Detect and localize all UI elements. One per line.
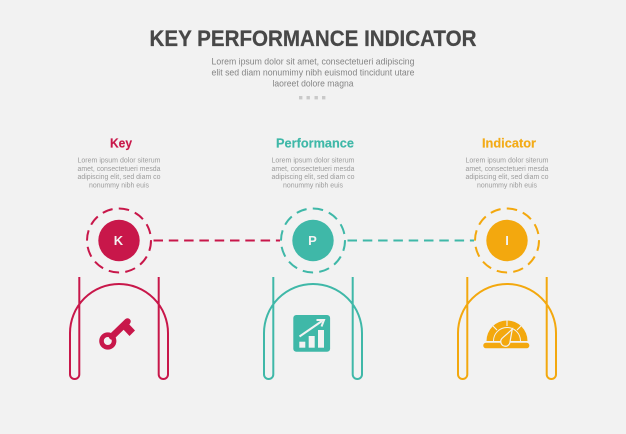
connector: key to performance (154, 240, 280, 242)
badge: I (475, 208, 539, 272)
description text: Lorem ipsum dolor sit amet, consectetueri adipiscing (212, 56, 415, 66)
text block: performance: amet, consectetueri mesda (272, 164, 355, 173)
text block: indicator: nonummy nibh euis (477, 180, 537, 190)
heading: performance: Performance (276, 136, 354, 150)
arch outline: performance (264, 277, 362, 379)
description text: elit sed diam nonumimy nibh euismod tincidunt utare (212, 68, 415, 78)
text block: indicator: amet, consectetueri mesda (466, 164, 549, 173)
title: KEY PERFORMANCE INDICATOR (150, 26, 476, 51)
badge: P (281, 208, 345, 272)
text block: key (78, 156, 161, 190)
badge: K (87, 208, 151, 272)
text block: indicator: adipiscing elit, sed diam co (466, 172, 548, 181)
connector: performance to indicator (348, 240, 474, 242)
text block: performance (272, 156, 355, 190)
pagination dots (299, 96, 325, 99)
panel: performance (264, 136, 362, 379)
text block: key: Lorem ipsum dolor siterum (78, 156, 160, 164)
text block: key: nonummy nibh euis (89, 180, 149, 190)
arch outline: key (70, 277, 168, 379)
heading: indicator: Indicator (482, 136, 536, 150)
icon: growth chart (293, 315, 330, 352)
text block: key: adipiscing elit, sed diam co (78, 172, 160, 181)
arch outline: indicator (458, 277, 556, 379)
text block: key: amet, consectetueri mesda (78, 164, 161, 173)
badge: I: I (505, 233, 509, 248)
text block: performance: Lorem ipsum dolor siterum (272, 156, 354, 164)
panel: key (70, 136, 168, 379)
text block: indicator: Lorem ipsum dolor siterum (466, 156, 548, 164)
panel: indicator (458, 136, 556, 379)
text block: performance: nonummy nibh euis (283, 180, 343, 190)
icon: key (102, 322, 135, 347)
icon: gauge (483, 320, 529, 348)
text block: indicator (466, 156, 549, 190)
badge: K: K (114, 233, 124, 248)
text block: performance: adipiscing elit, sed diam co (272, 172, 354, 181)
description text: laoreet dolore magna (272, 78, 354, 88)
description text (212, 56, 415, 88)
heading: key: Key (110, 136, 132, 150)
badge: P: P (308, 233, 317, 248)
